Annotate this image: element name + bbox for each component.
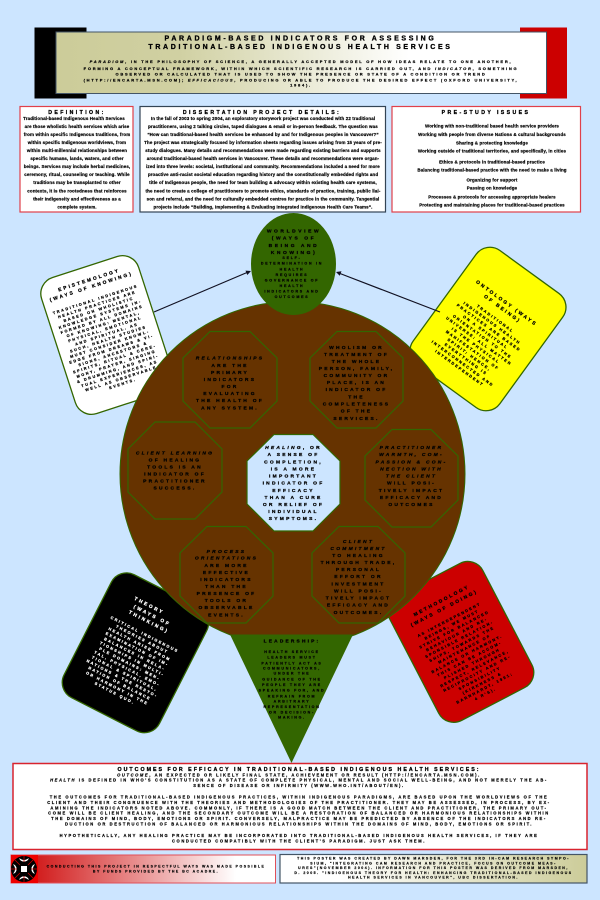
panel: leadership triangle: REPRESENTATION (263, 705, 321, 709)
panel: outcomes for efficacy: AMINING THE INDICATORS NOTED ABOVE. COMMONLY, IF THERE IS A GOOD MATCH BETWEEN THE CLIENT AND PRACTITIONER, THE PRIMARY OUT- (50, 805, 548, 810)
panel: funding acknowledgement: CONDUCTING THIS PROJECT IN RESPECTFUL WAYS WAS MADE POSSIBLE (47, 865, 265, 869)
panel: leadership triangle: OR DECISION- (269, 710, 315, 714)
octagon: process orientations: EVENTS. (208, 612, 245, 618)
panel: poster credits (280, 854, 587, 883)
panel: worldview circle: BEING AND (269, 243, 319, 249)
panel: dissertation project details: study dialogues. Many details and recommendations were made regarding existing barriers and supports (145, 148, 381, 153)
octagon: client learning: SUCCESS. (153, 486, 197, 492)
octagon: healing (centre): THAN A CURE (264, 495, 323, 501)
text: methodology: METHODOLOGY (413, 584, 471, 618)
octagon: relationships: INDICATORS (204, 377, 256, 383)
text: epistemology: TRADITIONAL INDIGENOUS (52, 284, 139, 316)
octagon: client learning (128, 422, 222, 519)
panel: leadership triangle: COMMUNICATORS, (263, 667, 321, 671)
panel: definition: beings. Services may include herbal medicines, (24, 164, 130, 169)
octagon: process orientations: INDICATORS (200, 577, 253, 583)
text: methodology: RECIPROCITY AND RE- (443, 654, 512, 693)
text: epistemology: BASED ON WHOLISTIC (63, 296, 135, 323)
text: methodology: BEHAVIOUR AND RE- (425, 617, 489, 652)
panel shape: epistemology (36, 251, 178, 419)
text: methodology: (KIRKNESS & (462, 671, 503, 695)
panel: outcomes for efficacy: COME WILL BE CLIENT HEALING, AND THE SECONDARY OUTCOME WILL BE A RESTORATION OF BALANCED OR HARMONIOUS RELATIONSHIPS WITHIN (48, 811, 550, 816)
panel: leadership triangle: GUIDANCE OF THE (262, 677, 322, 681)
text: theory: TAL, PHYSICAL, EMO- (93, 651, 161, 688)
definitions of paradigm and indicator: OBSERVED OR CALCULATED THAT IS USED TO SHOW THE PRESENCE OR STATE OF A CONDITION OR TREND (115, 72, 487, 77)
octagon: practitioner warmth: TIVELY IMPACT (379, 488, 444, 494)
panel: pre-study issues: Processes & protocols for accessing appropriate healers (428, 194, 556, 199)
octagon: client learning: INDICATOR OF (144, 472, 206, 478)
text: methodology: MAINTENANCE OF (438, 634, 492, 665)
text: epistemology: TUAL EXPERIENCES, AS (81, 360, 159, 388)
text: theory (78, 589, 194, 713)
octagon: wholism: PLACE, IS AN (327, 380, 386, 386)
octagon: process orientations: PRESENCE OF (197, 591, 256, 597)
text: epistemology (46, 264, 166, 400)
text: methodology: SHIPS, TOWARDS THE (429, 626, 495, 663)
panel: definition: within multi-millennial relationships between (26, 148, 127, 153)
panel: dissertation project details: son and referral, and the need for culturally embedded centres for practice in the community. Tangential (147, 197, 379, 202)
text: ontology: ONTOLOGY (WAYS (474, 279, 538, 328)
definitions of paradigm and indicator: 1984). (290, 83, 312, 88)
text: ontology: SPIRIT: HENCE, (447, 338, 492, 372)
octagon: healing (centre) (247, 434, 340, 531)
panel: funding acknowledgement (11, 855, 276, 883)
octagon: practitioner warmth: OUTCOMES (388, 502, 435, 508)
text: theory: STATUS QUO. (94, 682, 135, 705)
panel: dissertation project details: DISSERTATION PROJECT DETAILS: (183, 110, 341, 116)
octagon: client commitment: OUTCOMES. (334, 610, 383, 616)
arrow: ontology to worldview (336, 271, 440, 312)
octagon: relationships: THE HEALTH OF (196, 398, 264, 404)
panel: leadership triangle (230, 634, 353, 763)
octagon: healing (centre): INDIVIDUAL (268, 509, 319, 515)
text: epistemology: MUST CONSIDER KNOWL- (70, 330, 150, 359)
text: epistemology: FORMED BY ALL DOMAINS (60, 304, 144, 335)
text: methodology: AS INTERDEPENDENT (417, 602, 482, 638)
octagon: wholism: COMPLETENESS (323, 402, 390, 408)
title banner (34, 28, 567, 98)
panel: pre-study issues: Working with non-traditional based health service providers (425, 124, 559, 129)
title (148, 35, 453, 51)
panel: pre-study issues: Working with people from diverse Nations & cultural backgrounds (418, 132, 566, 137)
octagon: healing (centre): IMPORTANT (269, 474, 318, 480)
panel: poster credits: D. 2005. "INDIGENOUS THEORY FOR HEALTH: ENHANCING TRADITIONAL-BASED INDIGENOUS (294, 871, 573, 875)
panel: outcomes for efficacy: OUTCOMES FOR EFFICACY IN TRADITIONAL-BASED INDIGENOUS HEALTH SERVICES: (117, 767, 481, 773)
definitions of paradigm and indicator: FORMING A CONCEPTUAL FRAMEWORK, WITHIN WHICH SCIENTIFIC RESEARCH IS CARRIED OUT, AND INDICATOR, SOMETHING (84, 66, 518, 71)
panel: outcomes for efficacy: CONDUCTED COMPATIBLY WITH THE CLIENT'S PARADIGM. JUST ASK THEM. (172, 838, 426, 843)
octagon: practitioner warmth: PRACTITIONER (380, 445, 443, 451)
octagon: wholism: OF THE (341, 408, 372, 414)
panel: leadership triangle: MAKING. (278, 716, 306, 720)
octagon: wholism: PERSON, FAMILY, (319, 366, 394, 372)
panel: outcomes for efficacy: HYPOTHETICALLY, ANY HEALING PRACTICE MAY BE INCORPORATED INTO TRADITIONAL-BASED INDIGENOUS HEALTH SERVICES, IF THEY ARE (60, 833, 538, 838)
panel: worldview circle (251, 213, 336, 315)
panel: worldview circle: HEALTH (280, 267, 304, 271)
panel: definition: traditions may be transplanted to other (33, 180, 121, 185)
panel: worldview circle: DETERMINATION IN (261, 262, 323, 266)
octagon: healing (centre): HEALING, OR (265, 445, 322, 451)
text: theory: TIONAL & SPIRITUAL, (91, 656, 158, 692)
panel shape: methodology (382, 556, 540, 728)
octagon: client learning: OF HEALING (149, 458, 201, 464)
arrow: epistemology to worldview (154, 271, 251, 312)
panel: worldview circle: SELF- (282, 256, 302, 260)
text: theory: THEORY (133, 596, 165, 616)
octagon: process orientations: ARE MORE (204, 563, 249, 569)
octagon: process orientations: PROCESS (207, 549, 246, 555)
panel: pre-study issues: Organizing for support (467, 177, 518, 182)
octagon: client commitment: INVESTMENT (331, 582, 386, 588)
octagon: wholism: SERVICES. (333, 416, 380, 422)
octagon: healing (centre): SYMPTOMS. (269, 516, 318, 522)
text: epistemology: SPIRITS, RITUAL & CERE- (73, 344, 157, 375)
panel: definition: ceremony, ritual, counseling or teaching. While (24, 172, 130, 177)
panel: definition (20, 106, 133, 212)
text: theory: (WAYS OF (132, 604, 171, 628)
panel: worldview circle: HEALTH (280, 284, 304, 288)
octagon: process orientations: THAN THE (205, 584, 248, 590)
title: PARADIGM-BASED INDICATORS FOR ASSESSING (165, 35, 436, 42)
octagon: client commitment: TO HEALING (332, 553, 385, 559)
octagon: client learning: TOOLS IS AN (147, 464, 203, 470)
panel: dissertation project details: “How can traditional-based health services be enhanced by and for Indigenous peoples in Vancouver?” (147, 132, 379, 137)
octagon: wholism: COMMUNITY OR (324, 373, 389, 379)
octagon: process orientations: ORIENTATIONS (195, 556, 258, 562)
panel: leadership triangle: PATIENTLY ACT AS (261, 661, 323, 665)
text: epistemology: EDGE FROM DREAMS & VI- (69, 334, 154, 365)
text: ontology: ON A SPIRITUAL (462, 315, 509, 350)
text: ontology: IS THE PHYSICAL (451, 327, 501, 365)
text: methodology: (WAYS OF DOING) (410, 589, 479, 628)
octagon: wholism: THE (348, 394, 365, 400)
panel: definition: contexts, it is the rootedness that reinforces (27, 188, 127, 193)
panel: outcomes for efficacy: CLIENT AND THEIR CONGRUENCE WITH THE THEORIES AND METHODOLOGIES OF THE PRACTITIONER. THEY MAY BE ASSESSED, IN PROCESS, BY EX- (47, 800, 551, 805)
octagon: practitioner warmth: EFFICACY AND (380, 495, 443, 501)
octagon: relationships: FOR (221, 384, 239, 390)
panel: poster credits: SIUM, "INTEGRATING CAM RESEARCH AND PRACTICE, FOCUS ON OUTCOME MEAS- (310, 862, 557, 866)
octagon: relationships: EVALUATING (203, 391, 257, 397)
panel: leadership triangle: ARBITRARY (274, 700, 310, 704)
panel: outcomes for efficacy: HEALTH IS DEFINED IN WHO'S CONSTITUTION AS A STATE OF COMPLETE PHYSICAL, MENTAL AND SOCIAL WELL-BEING, AND NOT MERELY THE AB- (50, 778, 548, 783)
definitions of paradigm and indicator: PARADIGM, IN THE PHILOSOPHY OF SCIENCE, A GENERALLY ACCEPTED MODEL OF HOW IDEAS RELATE TO ONE ANOTHER, (90, 59, 512, 64)
panel: funding acknowledgement: BY FUNDS PROVIDED BY THE BC ACADRE. (93, 869, 219, 873)
panel: dissertation project details: practitioners, using 2 talking circles, taped dialogues & email or in-person feedback. The question was (148, 124, 378, 129)
octagon: client learning: PRACTITIONER (143, 478, 207, 484)
panel: definition: from within specific Indigenous traditions, from (24, 132, 130, 137)
octagon: practitioner warmth: THE CLIENT (386, 474, 437, 480)
panel: dissertation project details: projects include “Building, Implementing & Evaluating Integrated Indigenous Health Care Teams”. (154, 205, 372, 210)
panel: worldview circle: (WAYS OF (272, 236, 316, 242)
icon: medallion logo (11, 855, 38, 883)
panel: pre-study issues: PRE-STUDY ISSUES (442, 110, 530, 116)
panel: definition: their Indigeneity and effectiveness as a (33, 197, 121, 202)
panel: pre-study issues: Balancing traditional-based practice with the need to make a living (417, 167, 567, 172)
text: epistemology: SUCH, HEALTH STUDIES (70, 325, 147, 354)
octagon: relationships: ARE THE (211, 363, 249, 369)
text: ontology: PRACTICES ARE BASED (456, 303, 522, 353)
octagon: client commitment: EFFICACY AND (327, 602, 390, 608)
panel: dissertation project details: title of Indigenous people, the need for team building & advocacy within existing health care systems, (149, 180, 377, 185)
text: methodology: THIS CAN BE ACCOM- (437, 641, 503, 677)
text: epistemology: OF KNOWING: MENTAL, (66, 311, 141, 338)
octagon: practitioner warmth: WARMTH, COM- (379, 452, 444, 458)
octagon: practitioner warmth: PASSION & CON- (376, 460, 447, 466)
octagon: client commitment: THROUGH TRADE, (321, 560, 396, 566)
text: methodology: STRIVE FOR BALANCED (419, 610, 490, 650)
text: theory: RATION OF BALANCE (88, 666, 152, 701)
octagon: client commitment: EFFORT OR (334, 574, 383, 580)
text: methodology: SPONSIBILITY (458, 666, 502, 691)
panel: leadership triangle: LEADERS MUST (267, 656, 317, 660)
octagon: wholism: WHOLISM OR (329, 345, 384, 351)
text: theory: THINKING) (127, 610, 170, 635)
octagon: practitioner warmth: NECTION WITH (380, 466, 443, 472)
text: epistemology: HEALTH PRACTICES ARE (58, 290, 137, 319)
panel: definition: are those wholistic health services which arise (25, 124, 130, 129)
octagon: relationships: PRIMARY (211, 370, 249, 376)
text: epistemology: & DRUMMING, AND SPIRI- (77, 354, 160, 384)
octagon: relationships: RELATIONSHIPS (196, 356, 264, 362)
text: methodology: BARNHARDT, 1991: (456, 672, 514, 705)
text: ontology: INTERDEPENDENT (434, 349, 485, 387)
text: methodology (403, 581, 524, 713)
panel: dissertation project details: The project was strategically focused by information sheets regarding issues arising from 15 years of pre- (144, 140, 382, 145)
panel: outcomes for efficacy: SENCE OF DISEASE OR INFIRMITY (WWW.WHO.INT/ABOUT/EN). (193, 783, 405, 788)
octagon: client commitment: CLIENT (343, 539, 374, 545)
text: epistemology: AND SPIRITUAL. AS (75, 322, 139, 347)
text: theory: THEORIES ABOUT (115, 625, 169, 655)
panel: leadership triangle: SPEAKING FOR, AND (259, 689, 325, 693)
panel: dissertation project details (140, 106, 386, 212)
panel: definition: DEFINITION: (48, 110, 106, 116)
panel: leadership triangle: REFRAIN FROM (268, 694, 316, 698)
panel: definition: complete system. (57, 205, 97, 210)
text: theory: BALANCES IN RELA- (103, 637, 166, 672)
text: ontology: ORIENTATION TO THE (452, 314, 512, 360)
panel: pre-study issues: Passing on knowledge (467, 186, 518, 191)
octagon: relationships (183, 332, 277, 428)
panel: outcomes for efficacy: THE OUTCOMES FOR TRADITIONAL-BASED INDIGENOUS PRACTICES, WITHIN INDIGENOUS PARADIGMS, ARE BASED UPON THE WORLDVIEWS OF THE (50, 794, 548, 799)
text: theory: CRITICAL INDIGENOUS (110, 616, 179, 654)
octagon: wholism (310, 332, 403, 428)
text: ontology: MANIFESTATION OF (445, 330, 500, 371)
text: ontology: INDIGENOUS HEALTH (462, 301, 521, 346)
text: ontology: EVERYTHING IS (444, 343, 488, 376)
octagon: healing (centre): IS A MORE (271, 466, 316, 472)
text: ontology: OF BEING) (482, 294, 522, 325)
panel: outcomes for efficacy: OUTCOME, AN EXPECTED OR LIKELY FINAL STATE, ACHIEVEMENT OR RESULT (HTTP://ENCARTA.MSN.COM). (117, 772, 481, 777)
panel: worldview circle: INDICATORS AND (264, 289, 320, 293)
panel: pre-study issues: Sharing & protecting knowledge (456, 140, 528, 145)
octagon: healing (centre): A SENSE OF (268, 452, 319, 458)
text: epistemology: MONY, PRAYER, SINGING (76, 349, 157, 379)
text: epistemology: EVENTS. (109, 378, 137, 390)
text: methodology: BALANCE OR HARMONY. (431, 634, 504, 674)
octagon: client commitment (312, 526, 405, 623)
panel shape: ontology (403, 241, 573, 417)
panel: worldview circle: KNOWING) (271, 250, 317, 256)
text: epistemology: EPISTEMOLOGY (58, 268, 121, 293)
octagon: process orientations: EFFECTIVE (203, 570, 250, 576)
panel: leadership triangle: UNDER THE (274, 672, 310, 676)
definitions of paradigm and indicator (84, 59, 518, 88)
text: theory: HEALTH ARISE FROM (108, 627, 172, 662)
title: TRADITIONAL-BASED INDIGENOUS HEALTH SERVICES (148, 44, 453, 51)
text: ontology: UNIVERSE: ALL MATTER (445, 316, 513, 367)
panel: worldview circle: GOVERNANCE OF (265, 279, 319, 283)
panel: definition: within specific Indigenous worldviews, from (27, 140, 126, 145)
text: theory: PLE DOMAINS: MEN- (98, 647, 161, 681)
text: theory: NATIONS & THE RESTO- (86, 659, 159, 699)
panel: leadership triangle: HEALTH SERVICE (264, 650, 320, 654)
octagon: relationships: ANY SYSTEM. (201, 406, 259, 412)
panel: pre-study issues: Working outside of traditional territories, and specifically, in cities (418, 149, 566, 154)
text: ontology (426, 278, 541, 394)
panel: dissertation project details: proactive anti-racist societal education regarding history and the constitutionally embedded rights and (148, 172, 378, 177)
panel: poster credits: URES"(NOVEMBER 2004). INFORMATION FOR THIS POSTER WAS DERIVED FROM MARSDEN, (298, 866, 569, 870)
text: methodology: PLISHED THROUGH (443, 648, 501, 680)
octagon: process orientations: TOOLS OR (205, 598, 248, 604)
panel: leadership triangle: LEADERSHIP: (264, 638, 320, 644)
text: epistemology: SIONS, ANCESTORS & (78, 341, 149, 367)
panel: dissertation project details: In the fall of 2003 to spring 2004, an exploratory storywork project was conducted with 22 traditional (151, 116, 375, 121)
text: theory: TIONSHIPS IN MULTI- (99, 641, 165, 677)
text: epistemology: (WAYS OF KNOWING) (49, 271, 134, 304)
text: methodology: BEINGS, WE MUST (424, 609, 480, 641)
octagon: wholism: TREATMENT OF (324, 352, 389, 358)
panel: definition: Traditional-based Indigenous Health Services (23, 116, 125, 121)
octagon: client commitment: PERSONAL (336, 567, 381, 573)
octagon: wholism: INDICATOR OF (326, 387, 387, 393)
text: methodology: SPONSIBLE RELATION- (425, 620, 494, 659)
large brown circle (120, 302, 465, 646)
text: theory: OR HARMONY IN THE (85, 671, 149, 706)
panel: dissertation project details: around traditional-based health services in Vancouver. These details and recommendations were organ- (147, 156, 380, 161)
octagon: practitioner warmth (365, 430, 458, 527)
octagon: client learning: CLIENT LEARNING (136, 450, 214, 456)
text: ontology: INTERCONNECTED AND (431, 340, 495, 388)
panel: poster credits: HEALTH SERVICES IN VANCOUVER", UBC DISSERTATION. (348, 876, 519, 880)
panel: dissertation project details: the need to create a college of practitioners to promote ethics, standards of practice, training, public liai- (146, 188, 381, 193)
panel: pre-study issues: Ethics & protocols in traditional-based practice (439, 159, 545, 164)
panel: dissertation project details: ized into three levels: societal, institutional and community. Recommendations included a need for more (146, 164, 380, 169)
panel: worldview circle: OUTCOMES (275, 295, 309, 299)
text: epistemology: WELL AS OBSERVABLE (85, 365, 158, 392)
panel: outcomes for efficacy: DUCTION OR DESTRUCTION OF BALANCED OR HARMONIOUS RELATIONSHIPS WITHIN THE DOMAINS OF MIND, BODY, EMOTIONS OR SPIRIT. (65, 822, 533, 827)
octagon: client commitment: COMMITMENT (330, 546, 387, 552)
panel: outcomes for efficacy (13, 764, 587, 850)
panel: pre-study issues (392, 106, 580, 212)
octagon: healing (centre): COMPLETION, (264, 460, 323, 466)
panel: leadership triangle: PEOPLE THEY ARE (262, 683, 322, 687)
panel shape: theory (56, 567, 214, 739)
panel: poster credits: THIS POSTER WAS CREATED BY DAWN MARSDEN, FOR THE 3RD IN-CAM RESEARCH SYMPO- (297, 857, 570, 861)
text: ontology: TRADITIONAL (476, 304, 515, 334)
octagon: process orientations (180, 526, 273, 623)
text: methodology: RESPECT, RELEVANCE, (440, 649, 510, 688)
octagon: client commitment: WILL POSI- (334, 588, 383, 594)
definitions of paradigm and indicator: (HTTP://ENCARTA.MSN.COM); EFFICACIOUS, PRODUCING OR ABLE TO PRODUCE THE DESIRED EFFECT (OXFORD UNIVERSITY, (84, 77, 518, 82)
panel: worldview circle: REQUIRES (276, 273, 308, 277)
panel: worldview circle: WORLDVIEW (267, 228, 321, 234)
text: epistemology: PHYSICAL, EMOTIONAL (68, 316, 143, 343)
octagon: process orientations: OBSERVABLE (198, 605, 255, 611)
text: methodology: 4 R'S). (474, 687, 497, 701)
panel: pre-study issues: Protecting and maintaining places for traditional-based practices (419, 203, 565, 208)
octagon: client commitment: TIVELY IMPACT (326, 596, 391, 602)
text: epistemology: KNOWLEDGE SYSTEMS IN- (58, 299, 142, 330)
octagon: healing (centre): OR RELIEF OF (263, 502, 324, 508)
text: theory: EXAMINATION OF IM- (105, 632, 170, 667)
octagon: practitioner warmth: WILL POSI- (387, 480, 436, 486)
octagon: healing (centre): EFFICACY (272, 488, 315, 494)
octagon: wholism: THE WHOLE (332, 359, 381, 365)
panel: definition: specific humans, lands, waters, and other (30, 156, 124, 161)
octagon: healing (centre): INDICATOR OF (263, 480, 324, 486)
panel: outcomes for efficacy: THE DOMAINS OF MIND, BODY, EMOTIONS OR SPIRIT. CONVERSELY, MALPRACTICE MAY BE PREDICTED BY ABSENCE OF THE INDICATORS AND RE- (51, 816, 547, 821)
